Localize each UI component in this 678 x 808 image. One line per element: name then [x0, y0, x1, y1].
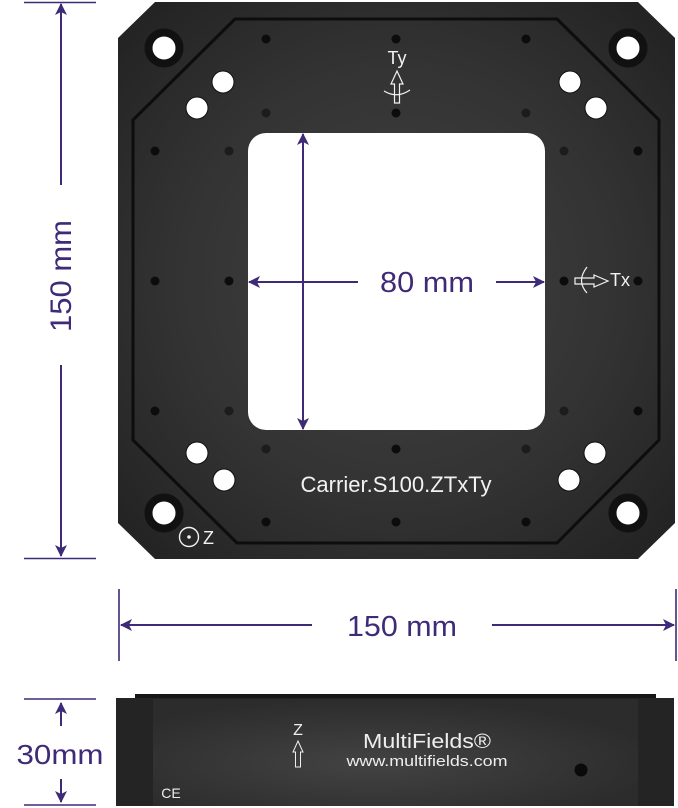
- CE mark: CE: [161, 785, 181, 801]
- side hole: [574, 764, 588, 776]
- Ty axis marker: [384, 48, 410, 103]
- dimension: 150 mm height: 150 mm: [45, 220, 78, 332]
- dimension: window height arrow: [302, 134, 304, 429]
- dimension: 30 mm height: [16, 699, 104, 805]
- brand name: MultiFields®: [363, 731, 491, 753]
- Tx axis marker: Tx: [610, 270, 630, 290]
- groove outline: [133, 19, 659, 543]
- carrier plate top view: [118, 2, 675, 559]
- dimension: 30 mm height: 30mm: [16, 739, 104, 770]
- website: www.multifields.com: [345, 753, 508, 770]
- Ty axis marker: Ty: [387, 48, 407, 68]
- Z axis marker side: [293, 722, 303, 767]
- counterbored corner holes: [148, 32, 644, 528]
- small threaded holes: [150, 34, 642, 526]
- side view of carrier: [116, 694, 674, 806]
- model name: Carrier.S100.ZTxTy: [300, 472, 492, 497]
- Z axis marker: [180, 528, 214, 548]
- dimension: 150 mm width: [119, 589, 676, 661]
- Z axis marker: Z: [203, 528, 214, 548]
- Tx axis marker: [575, 267, 630, 293]
- dimension: window width 80 mm: 80 mm: [380, 267, 474, 299]
- Z axis marker side: Z: [293, 722, 303, 739]
- central window: [248, 133, 545, 430]
- dimension: 150 mm width: 150 mm: [347, 611, 457, 643]
- white through holes: [186, 71, 607, 491]
- dimension: 150 mm height: [24, 2, 96, 558]
